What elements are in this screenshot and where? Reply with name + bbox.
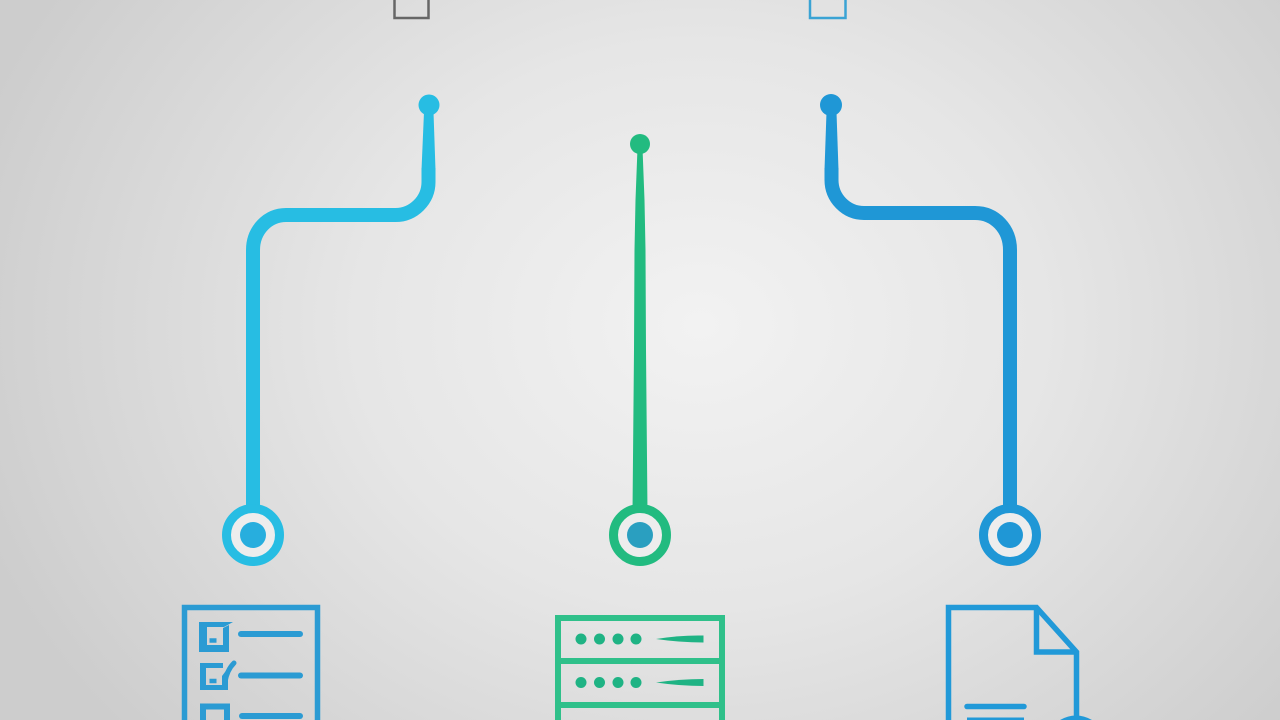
center connector bbox=[630, 134, 650, 512]
icon: checklist bbox=[184, 608, 318, 720]
right node bbox=[984, 508, 1036, 562]
right connector bbox=[820, 94, 1010, 512]
icon: partial blue square at top bbox=[810, 0, 846, 18]
icon: server rack bbox=[555, 618, 725, 720]
center node bbox=[614, 508, 666, 562]
left node bbox=[226, 508, 280, 562]
icon: partial grey square at top bbox=[394, 0, 428, 18]
left connector bbox=[253, 94, 440, 512]
icon: document bbox=[948, 608, 1092, 720]
